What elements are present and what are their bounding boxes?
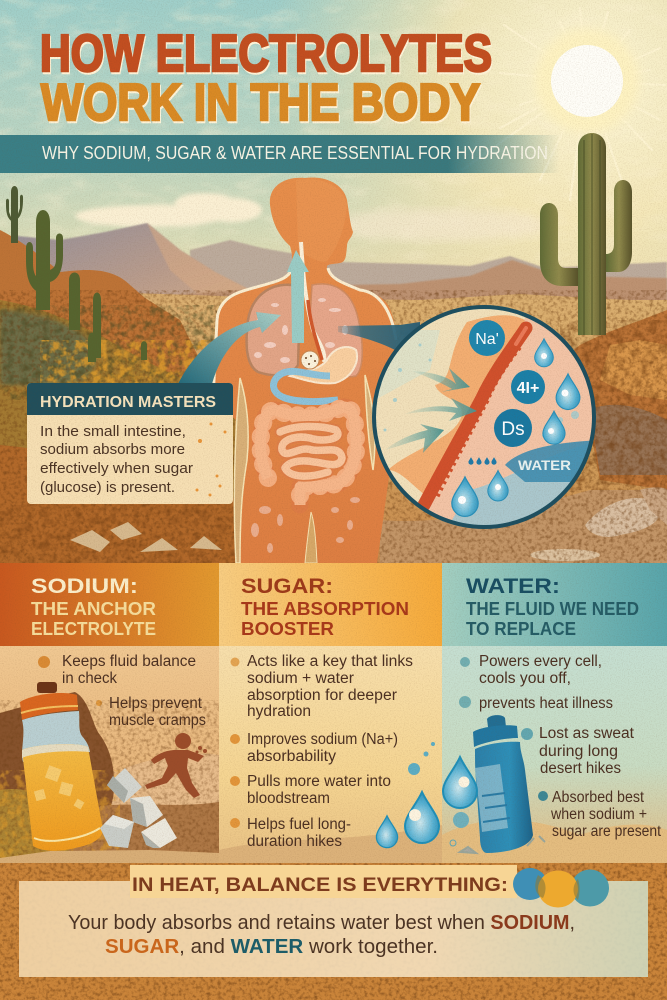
callout: hydration masters: (glucose) is present.: [40, 479, 175, 496]
sodium desert backdrop: [0, 692, 219, 863]
lower body speckles: [251, 497, 360, 553]
esophagus and upward arrow: [287, 242, 324, 362]
stomach and duodenum: [273, 347, 357, 402]
sugar bullets: Acts like a key that links: [247, 653, 413, 670]
salt cubes: [100, 768, 177, 848]
water bullets: prevents heat illness: [479, 695, 613, 712]
arm gaps: [234, 378, 248, 563]
callout: hydration masters: In the small intestine,: [40, 423, 186, 440]
water heading: WATER:: [466, 575, 560, 598]
title: HOW ELECTROLYTES: [40, 25, 492, 83]
title: [40, 25, 492, 132]
arrow: into magnified lens: [338, 322, 420, 352]
water bullets: during long: [539, 743, 618, 760]
red intestinal wall: [424, 328, 526, 505]
running figure: [145, 733, 207, 798]
water heading: [466, 575, 639, 639]
sugar bullets: Helps fuel long-: [247, 816, 351, 833]
sugar bullets: duration hikes: [247, 833, 342, 850]
arrow: intestine to bloodstream: [178, 312, 281, 384]
body silhouette: [213, 178, 397, 563]
balance circles icon: [513, 868, 609, 908]
sodium bullets: [38, 653, 206, 729]
absorption arrows: [412, 368, 470, 392]
sodium ion Na: [469, 320, 505, 356]
desert landscape: [0, 223, 667, 563]
sodium bullets: in check: [62, 670, 117, 687]
sugar heading: SUGAR:: [241, 575, 333, 598]
sodium bullets: Helps prevent: [109, 695, 203, 712]
water bullets: Lost as sweat: [539, 725, 635, 742]
lens tissue zones: [428, 318, 592, 520]
title: WORK IN THE BODY: [41, 74, 480, 132]
blue water bottle: [473, 715, 533, 853]
sugar bullets: sodium + water: [247, 670, 354, 687]
water bullets: [459, 653, 662, 840]
water bullets: Absorbed best: [552, 789, 645, 806]
subtitle band: WHY SODIUM, SUGAR & WATER ARE ESSENTIAL FOR HYDRATION: [42, 143, 548, 163]
human figure: [213, 178, 397, 563]
conclusion text: SUGAR, and WATER work together.: [105, 936, 438, 958]
subtitle band: [0, 135, 560, 173]
panel: water: [442, 563, 667, 863]
conclusion panel: [19, 881, 648, 977]
callout: hydration masters: [27, 383, 233, 504]
conclusion heading: [130, 865, 517, 898]
far mountain range: [190, 240, 667, 330]
sports drink bottle: [20, 682, 103, 851]
intestines: [260, 407, 356, 505]
sodium bullets: muscle cramps: [109, 712, 206, 729]
ion 4I+: 4I+: [517, 380, 539, 397]
sugar bullets: hydration: [247, 703, 311, 720]
sun with rays: [462, 8, 665, 200]
ion 4I+: [511, 370, 545, 404]
sugar bullets: bloodstream: [247, 790, 330, 807]
callout: hydration masters: effectively when sugar: [40, 460, 193, 477]
conclusion text: [68, 912, 575, 958]
cactus: large saguaro: [540, 133, 632, 335]
water heading: TO REPLACE: [466, 619, 576, 639]
sugar heading: BOOSTER: [241, 619, 334, 639]
sugar bullets: absorption for deeper: [247, 687, 397, 704]
WATER label: WATER: [518, 457, 571, 473]
lungs: [247, 284, 362, 377]
sugar water drops: [376, 742, 439, 848]
water bullets: cools you off,: [479, 670, 571, 687]
sodium bullets: Keeps fluid balance: [62, 653, 196, 670]
panel: sodium: [0, 563, 219, 863]
water bullets: when sodium +: [550, 806, 647, 823]
sugar bullets: [230, 653, 413, 850]
sugar bullets: Improves sodium (Na+): [247, 731, 398, 748]
sodium heading: ELECTROLYTE: [31, 619, 156, 639]
big left mountain: [17, 223, 262, 320]
shoulder outline: [213, 268, 396, 400]
sodium heading: THE ANCHOR: [31, 599, 156, 619]
sodium heading: SODIUM:: [31, 575, 138, 598]
conclusion heading: IN HEAT, BALANCE IS EVERYTHING:: [132, 875, 508, 896]
panel: sugar: [219, 563, 442, 863]
sugar heading: [241, 575, 409, 639]
water bullets: Powers every cell,: [479, 653, 602, 670]
callout: hydration masters: sodium absorbs more: [40, 441, 185, 458]
cactus: small left cacti: [6, 186, 147, 362]
water bullets: desert hikes: [540, 760, 621, 777]
water droplets in lens: [452, 339, 580, 516]
sugar heading: THE ABSORPTION: [241, 599, 409, 619]
sky background: [0, 0, 667, 300]
conclusion text: Your body absorbs and retains water best when SODIUM,: [68, 912, 575, 934]
sodium ion Na: Na': [475, 331, 499, 348]
mid ridge: [160, 260, 667, 340]
magnified intestine wall circle: [372, 305, 596, 529]
sugar bullets: Pulls more water into: [247, 773, 391, 790]
sodium heading: [31, 575, 156, 639]
water heading: THE FLUID WE NEED: [466, 599, 639, 619]
ion Ds: [494, 409, 532, 447]
callout: hydration masters: HYDRATION MASTERS: [40, 394, 216, 411]
water panel droplets: [443, 757, 545, 853]
sugar bullets: absorbability: [247, 748, 336, 765]
ion Ds: Ds: [501, 419, 525, 440]
